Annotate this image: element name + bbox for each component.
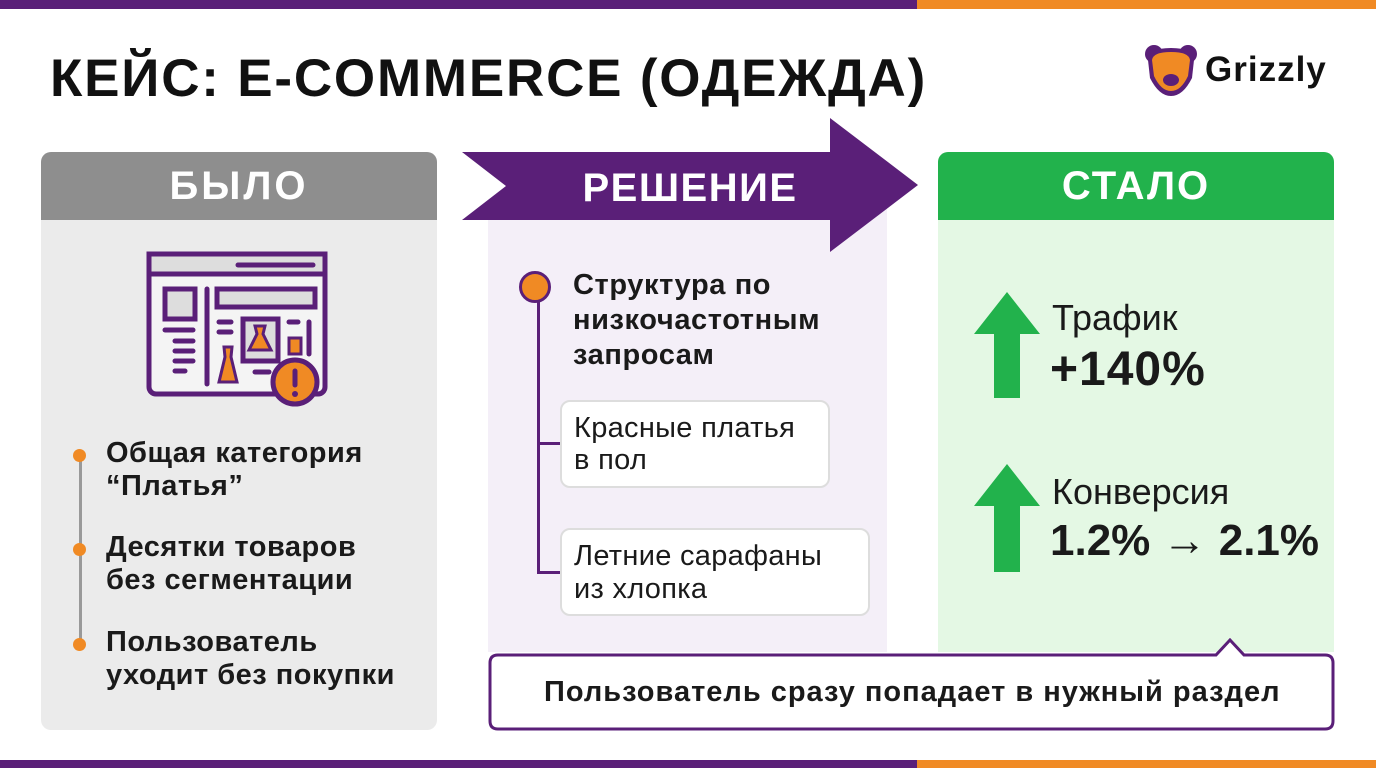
list: было: без сегментации [106, 564, 353, 596]
list: было: Пользователь [106, 626, 318, 658]
panel: решение [488, 200, 887, 652]
top bar [0, 0, 1376, 9]
box: sundresses: из хлопка [574, 573, 707, 605]
callout [488, 638, 1334, 730]
box: red dresses: в пол [574, 444, 647, 476]
tree: решение: запросам [573, 339, 715, 371]
metric: traffic: Трафик [1052, 297, 1178, 338]
list: было: Общая категория [106, 437, 363, 469]
tree: решение [519, 269, 870, 616]
tree: решение: Структура по [573, 269, 771, 301]
heading: стало [938, 152, 1334, 220]
logo [1145, 45, 1327, 96]
logo: Grizzly [1205, 50, 1327, 89]
arrow: решение: РЕШЕНИЕ [582, 166, 798, 210]
arrow: решение [462, 118, 918, 252]
metric: conversion: Конверсия [1052, 471, 1229, 512]
panel: было [41, 152, 437, 730]
list: было: “Платья” [106, 470, 243, 502]
box: red dresses [560, 400, 830, 488]
metric: conversion: 1.2% → 2.1% [1050, 516, 1319, 565]
bottom bar [0, 760, 1376, 768]
box: sundresses: Летние сарафаны [574, 540, 822, 572]
timeline line [79, 454, 82, 644]
panel: стало [938, 152, 1334, 652]
metric: traffic [974, 292, 1206, 398]
list: было [73, 437, 395, 691]
list: было: уходит без покупки [106, 659, 395, 691]
list: было: Десятки товаров [106, 531, 356, 563]
title: КЕЙС: E-COMMERCE (ОДЕЖДА) [50, 49, 927, 108]
metric: conversion [974, 464, 1319, 572]
box: sundresses [560, 528, 870, 616]
icon: browser with warning [146, 252, 328, 406]
box: red dresses: Красные платья [574, 412, 795, 444]
callout: Пользователь сразу попадает в нужный раздел [544, 676, 1281, 708]
heading: было: БЫЛО [169, 164, 309, 208]
metric: traffic: +140% [1050, 343, 1206, 396]
heading: стало: СТАЛО [1062, 164, 1210, 208]
heading: было [41, 152, 437, 220]
tree: решение: низкочастотным [573, 304, 820, 336]
